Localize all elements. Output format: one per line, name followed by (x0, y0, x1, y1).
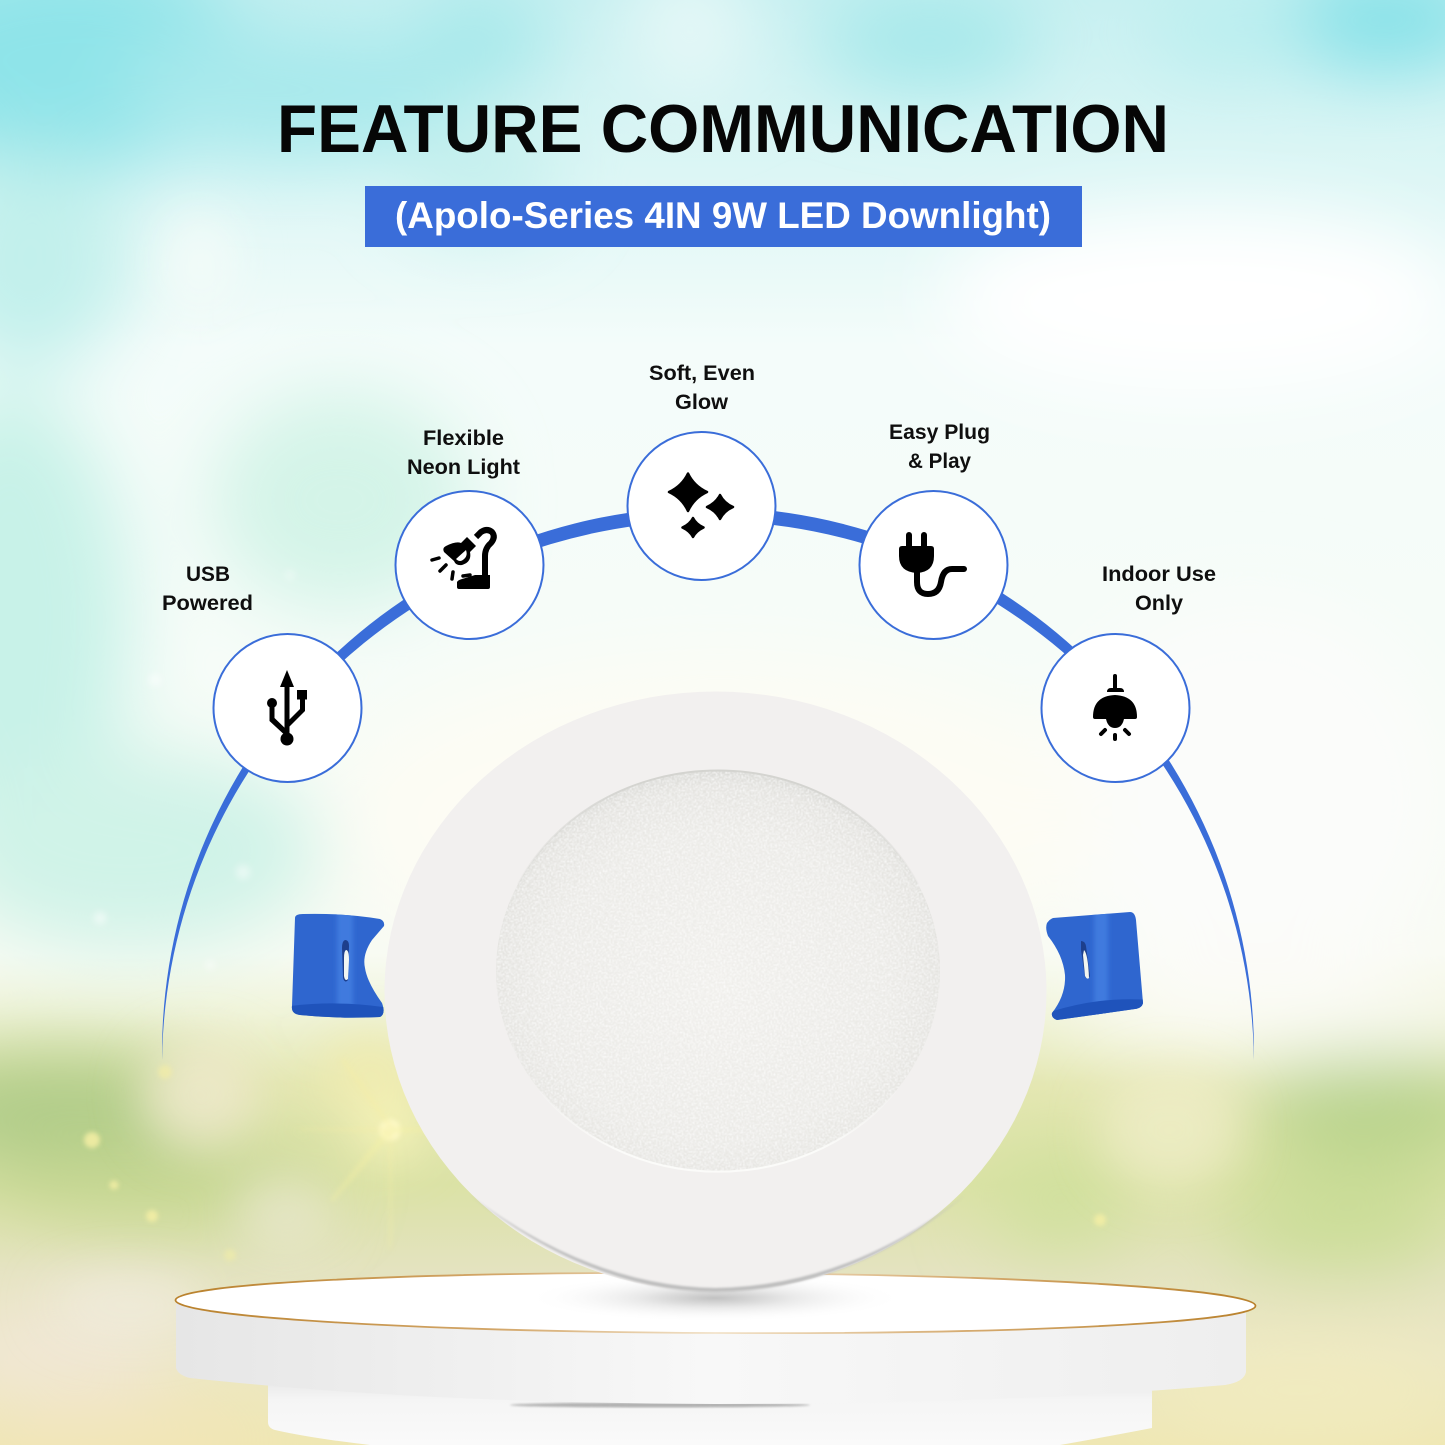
diffuser lower highlight ring (540, 1091, 896, 1172)
left blue spring clip (292, 914, 384, 1018)
label: USB Powered: Powered (162, 592, 253, 615)
title: FEATURE COMMUNICATION (277, 91, 1169, 167)
circle: plug (860, 491, 1008, 639)
feature: Indoor Use Only (1042, 563, 1216, 782)
icon: plug with cord (899, 532, 964, 594)
diffuser upper shadow edge (518, 771, 918, 884)
icon: desk lamp (432, 530, 494, 589)
label: Indoor Use Only: Only (1135, 592, 1183, 615)
circle: USB (214, 634, 362, 782)
sparkles (84, 1057, 1175, 1325)
feature: USB Powered (162, 563, 362, 782)
feature: Easy Plug & Play (860, 421, 1008, 639)
icon: pendant lamp (1093, 674, 1137, 739)
label: Soft, Even Glow: Soft, Even (649, 362, 755, 385)
rim bottom edge (470, 1195, 965, 1292)
label: Indoor Use Only: Indoor Use (1102, 563, 1216, 586)
lamp rim (384, 692, 1046, 1292)
label: USB Powered: USB (186, 563, 230, 586)
podium lower tier (268, 1375, 1152, 1445)
subtitle banner (365, 186, 1082, 247)
diffuser panel (496, 770, 940, 1172)
label: Easy Plug & Play: & Play (908, 450, 971, 473)
right blue spring clip (1046, 912, 1143, 1020)
circle: sparkle (628, 432, 776, 580)
subtitle banner: (Apolo-Series 4IN 9W LED Downlight) (395, 195, 1051, 236)
product: LED downlight (285, 692, 1150, 1292)
circle: lamp (396, 491, 544, 639)
tapered arc connecting the feature icons (162, 507, 1254, 1060)
label: Easy Plug & Play: Easy Plug (889, 421, 990, 444)
icon: sparkles (669, 474, 733, 537)
circle: pendant lamp (1042, 634, 1190, 782)
podium (175, 1270, 1256, 1445)
feature: Soft, Even Glow (628, 362, 776, 580)
feature: Flexible Neon Light (396, 427, 544, 639)
label: Flexible Neon Light: Neon Light (407, 456, 520, 479)
podium upper tier (176, 1303, 1246, 1404)
podium top surface (175, 1270, 1256, 1336)
podium shadow (525, 1274, 905, 1322)
contact shadow under podium tier (510, 1402, 810, 1408)
icon: USB symbol (267, 670, 307, 746)
label: Soft, Even Glow: Glow (675, 391, 729, 414)
label: Flexible Neon Light: Flexible (423, 427, 504, 450)
